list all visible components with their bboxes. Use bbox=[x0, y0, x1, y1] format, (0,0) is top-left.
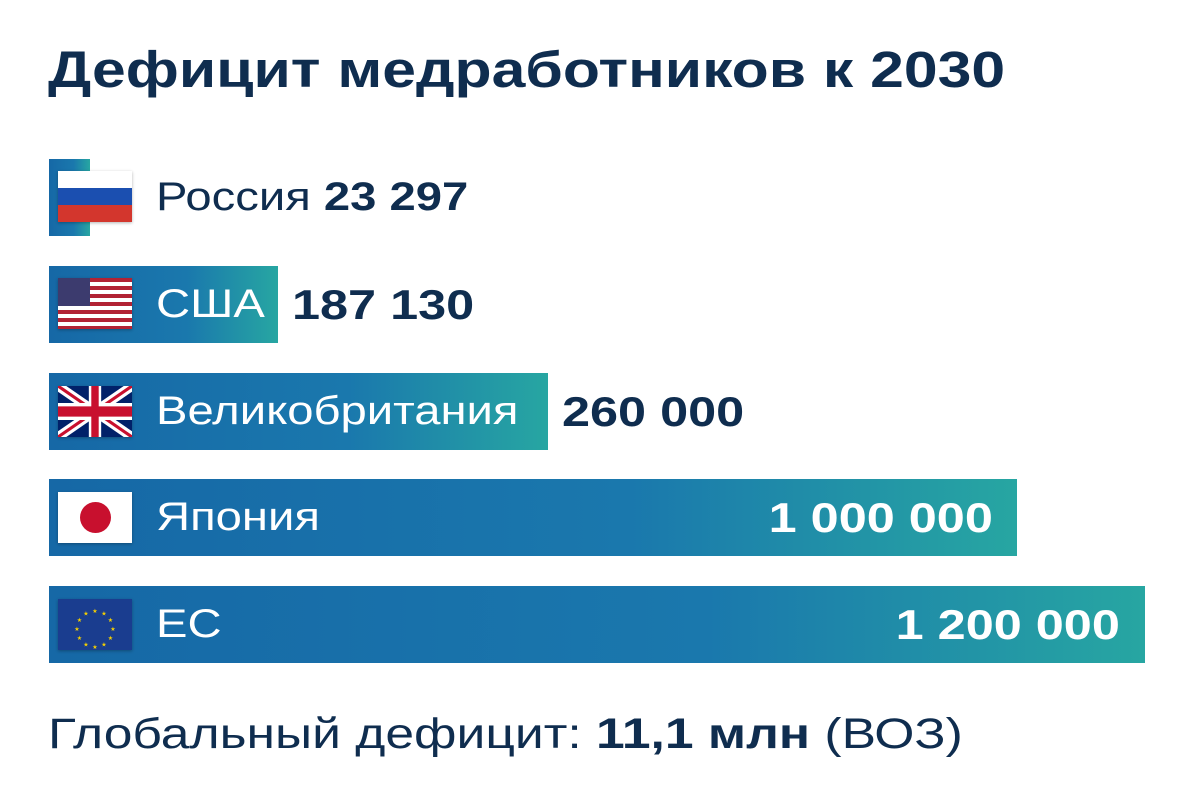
icon: EU flag: ★ bbox=[74, 626, 80, 633]
row: UK bbox=[49, 373, 744, 450]
value: EU: 1 200 000 bbox=[896, 601, 1120, 648]
value: UK: 260 000 bbox=[562, 388, 744, 435]
icon: UK flag bbox=[58, 386, 132, 437]
icon: EU flag: ★ bbox=[77, 617, 82, 624]
row: Russia bbox=[49, 159, 468, 236]
bar: Japan bbox=[49, 479, 1017, 556]
title: Дефицит медработников к 2030 bbox=[48, 41, 1005, 98]
footer: global deficit: Глобальный дефицит: 11,1 млн (ВОЗ) bbox=[48, 710, 963, 758]
icon: Japan flag bbox=[58, 492, 132, 543]
icon: EU flag: ★ bbox=[83, 642, 89, 648]
bar: UK bbox=[49, 373, 548, 450]
icon: EU flag: ★ bbox=[77, 635, 82, 642]
row: USA bbox=[49, 266, 474, 343]
bar: Russia bbox=[49, 159, 90, 236]
icon: EU flag: ★ bbox=[110, 626, 116, 633]
icon: EU flag: ★ bbox=[108, 617, 113, 624]
icon: EU flag: ★ bbox=[92, 608, 98, 615]
label: Russia: Россия 23 297 bbox=[156, 175, 468, 219]
value: Japan: 1 000 000 bbox=[769, 494, 993, 541]
label: EU: ЕС bbox=[156, 602, 222, 646]
icon: Russian flag bbox=[58, 171, 132, 222]
icon: EU flag: ★ bbox=[101, 610, 107, 618]
row: Japan bbox=[49, 479, 1017, 556]
value: USA: 187 130 bbox=[292, 281, 474, 328]
bar: EU bbox=[49, 586, 1145, 663]
icon: EU flag: ★ bbox=[108, 635, 113, 642]
row: EU bbox=[49, 586, 1145, 663]
icon: EU flag: ★ bbox=[101, 642, 107, 648]
icon: US flag bbox=[58, 278, 132, 329]
label: Japan: Япония bbox=[156, 495, 320, 539]
label: UK: Великобритания bbox=[156, 389, 518, 433]
icon: EU flag: ★ bbox=[83, 610, 89, 618]
bar: USA bbox=[49, 266, 278, 343]
label: USA: США bbox=[156, 282, 265, 326]
icon: EU flag bbox=[58, 599, 132, 650]
